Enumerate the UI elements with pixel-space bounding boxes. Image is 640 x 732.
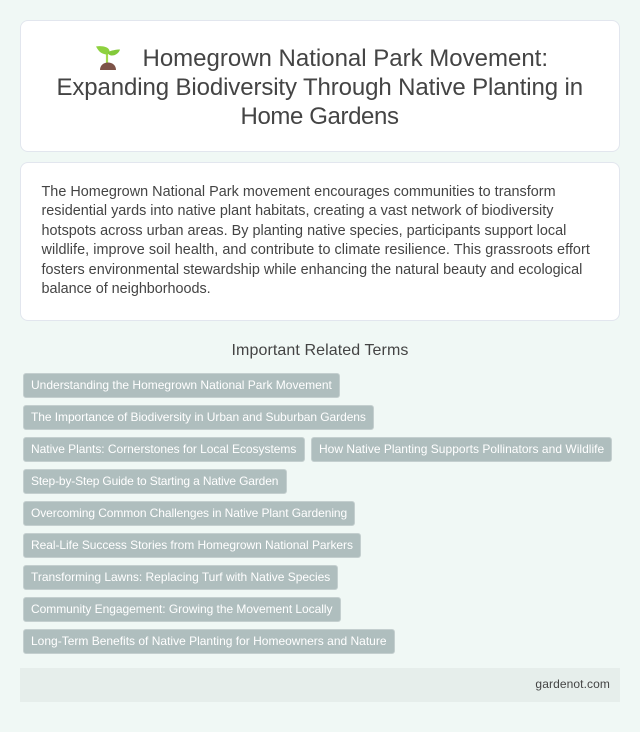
tag: Community Engagement: Growing the Movement Locally bbox=[31, 602, 332, 616]
text block: description paragraph: fosters environmental stewardship while enhancing the natural beauty and ecological bbox=[42, 262, 582, 278]
tag bbox=[23, 629, 394, 654]
heading: related terms: Important Related Terms bbox=[232, 342, 408, 359]
heading: main title bbox=[56, 45, 583, 130]
tag bbox=[23, 469, 286, 494]
panel: title card bbox=[20, 20, 620, 152]
tag bbox=[23, 565, 338, 590]
heading: main title: Homegrown National Park Movement: bbox=[142, 45, 548, 72]
text block: description paragraph: residential yards into native plant habitats, creating a vast network of biodiversity bbox=[42, 203, 553, 219]
tag bbox=[23, 533, 361, 558]
icon: seedling bbox=[96, 46, 120, 70]
tag: Real-Life Success Stories from Homegrown National Parkers bbox=[31, 538, 353, 552]
heading: main title: Home Gardens bbox=[240, 103, 399, 130]
tag bbox=[23, 597, 340, 622]
text block: description paragraph: The Homegrown National Park movement encourages communities to transform bbox=[42, 184, 556, 200]
tag bbox=[23, 373, 340, 398]
footer text: site name: gardenot.com bbox=[535, 677, 610, 691]
text block: description paragraph: balance of neighborhoods. bbox=[42, 281, 211, 297]
text block: description paragraph: hotspots across urban areas. By planting native species, participants support local bbox=[42, 223, 566, 239]
footer bar bbox=[20, 668, 620, 702]
tag bbox=[311, 437, 612, 462]
tag: Understanding the Homegrown National Park Movement bbox=[31, 378, 332, 392]
text block: description paragraph: wildlife, improve soil health, and contribute to climate resilience. This grassroots effort bbox=[42, 242, 590, 258]
heading: main title: Expanding Biodiversity Through Native Planting in bbox=[56, 74, 583, 101]
tag: Native Plants: Cornerstones for Local Ecosystems bbox=[31, 442, 296, 456]
tag bbox=[23, 437, 304, 462]
list: related term tags bbox=[23, 373, 612, 654]
tag: The Importance of Biodiversity in Urban and Suburban Gardens bbox=[31, 410, 366, 424]
panel: description bbox=[20, 162, 620, 321]
tag: Transforming Lawns: Replacing Turf with Native Species bbox=[31, 570, 330, 584]
tag: Step-by-Step Guide to Starting a Native Garden bbox=[31, 474, 278, 488]
tag bbox=[23, 501, 354, 526]
tag: How Native Planting Supports Pollinators and Wildlife bbox=[319, 442, 604, 456]
tag bbox=[23, 405, 374, 430]
text block: description paragraph bbox=[42, 184, 590, 297]
tag: Long-Term Benefits of Native Planting for Homeowners and Nature bbox=[31, 634, 387, 648]
tag: Overcoming Common Challenges in Native Plant Gardening bbox=[31, 506, 347, 520]
